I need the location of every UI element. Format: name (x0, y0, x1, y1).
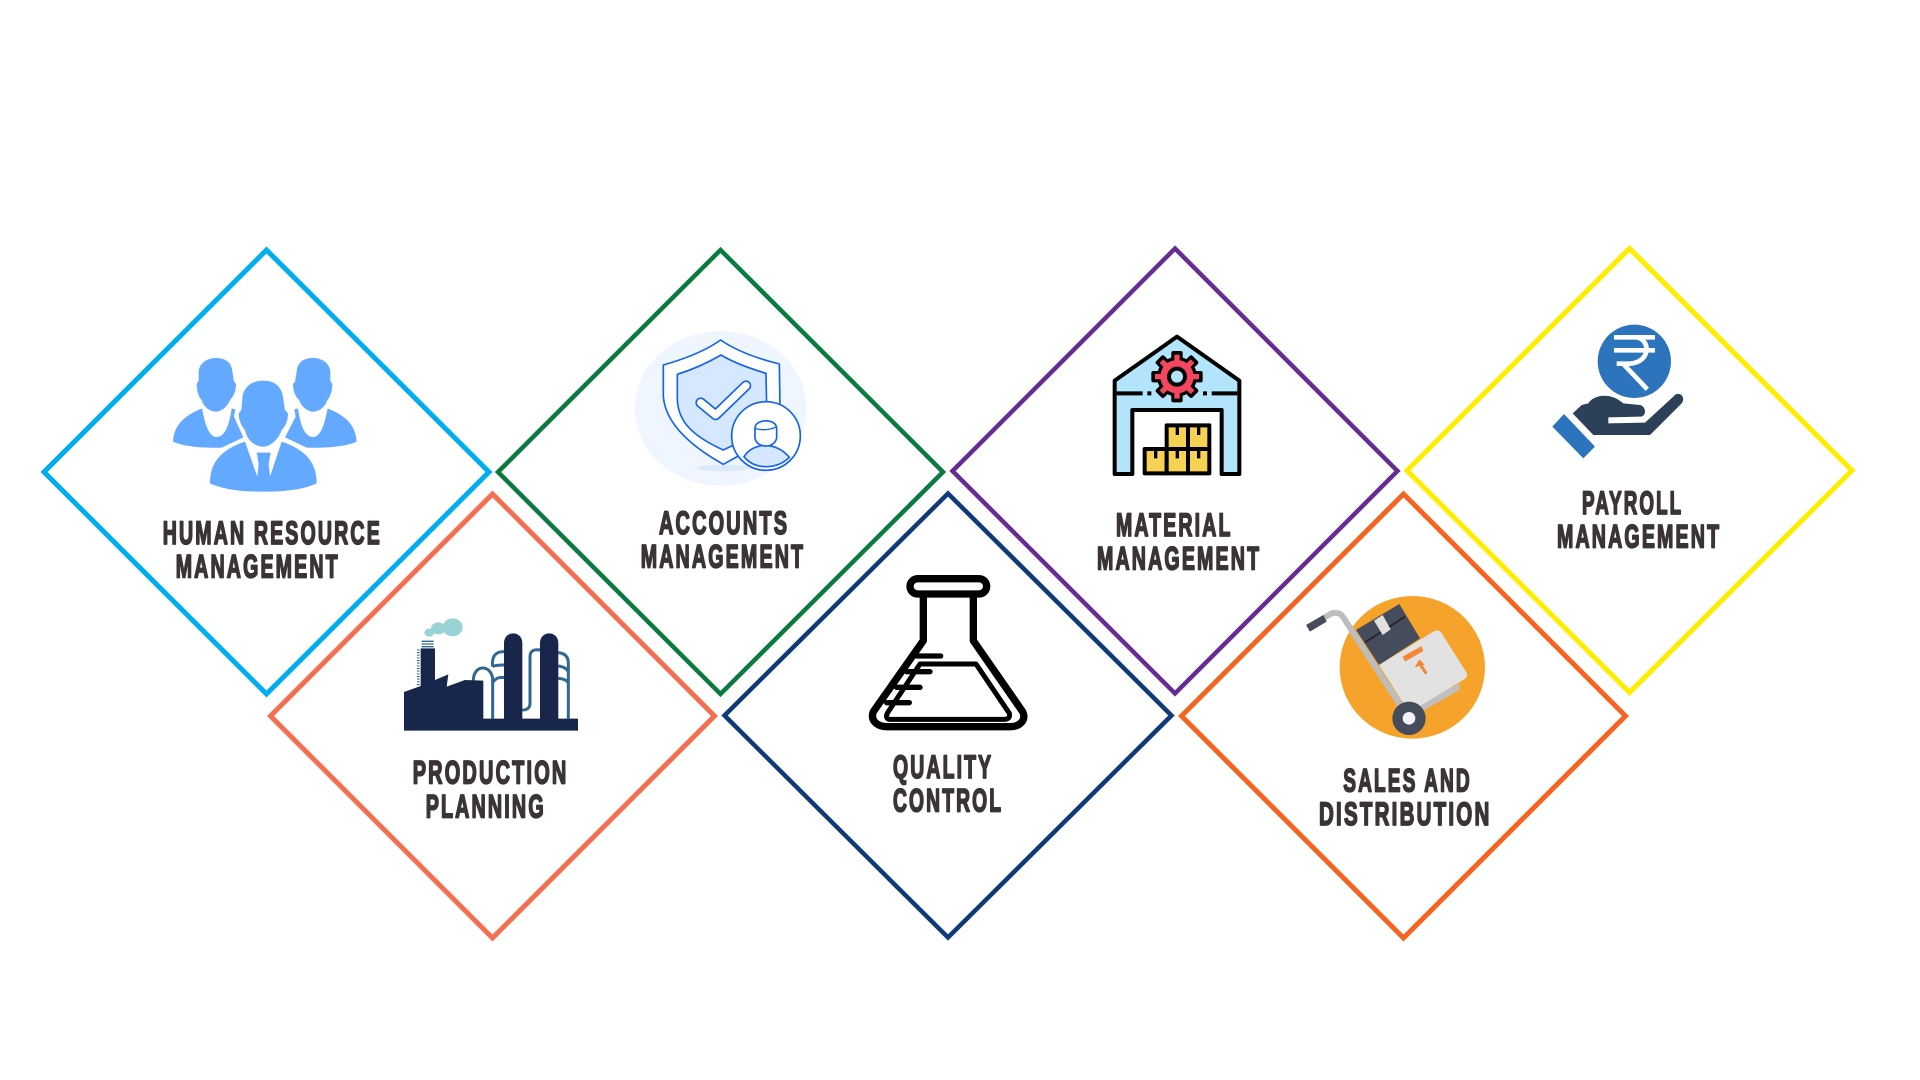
icon: lab flask (872, 579, 1024, 727)
panel: accounts management (498, 250, 943, 694)
label: material management: MATERIAL (1116, 507, 1232, 543)
panel: quality control (724, 494, 1172, 938)
label: payroll management (1557, 485, 1721, 554)
label: material management (1097, 507, 1261, 576)
icon: hand truck with boxes (1306, 596, 1485, 739)
label: accounts management: MANAGEMENT (641, 538, 805, 574)
label: sales and distribution: SALES AND (1343, 763, 1472, 799)
panel: sales and distribution (1182, 494, 1626, 938)
label: sales and distribution (1319, 763, 1492, 832)
label: sales and distribution: DISTRIBUTION (1319, 796, 1492, 832)
label: production planning (413, 755, 568, 824)
label: quality control: CONTROL (893, 782, 1003, 818)
panel: production planning (270, 494, 714, 938)
label: human resource management: MANAGEMENT (176, 548, 340, 584)
diamond outline: quality (724, 494, 1172, 938)
label: payroll management: MANAGEMENT (1557, 518, 1721, 554)
icon: shield with check and user (635, 331, 807, 486)
diamond outline: material (952, 248, 1398, 694)
diamond outline: accounts (498, 250, 943, 694)
diamond outline: sales (1182, 494, 1626, 938)
label: payroll management: PAYROLL (1582, 485, 1683, 521)
panel: material management (952, 248, 1398, 694)
icon: factory (404, 618, 578, 731)
icon: hand holding rupee coin (1552, 325, 1683, 458)
label: accounts management (641, 505, 805, 574)
label: human resource management: HUMAN RESOURCE (163, 515, 382, 551)
icon: warehouse with gear and boxes (1115, 337, 1239, 474)
panel: payroll management (1407, 248, 1852, 692)
label: quality control: QUALITY (893, 749, 993, 785)
panel: human resource management (44, 250, 489, 694)
label: material management: MANAGEMENT (1097, 540, 1261, 576)
label: quality control (893, 749, 1003, 818)
diamond outline: payroll (1407, 248, 1852, 692)
icon: group of people (173, 358, 357, 492)
label: accounts management: ACCOUNTS (659, 505, 789, 541)
diamond outline: human resource (44, 250, 489, 694)
label: production planning: PLANNING (426, 788, 546, 824)
diamond outline: production (270, 494, 714, 938)
label: production planning: PRODUCTION (413, 755, 568, 791)
label: human resource management (163, 515, 382, 584)
